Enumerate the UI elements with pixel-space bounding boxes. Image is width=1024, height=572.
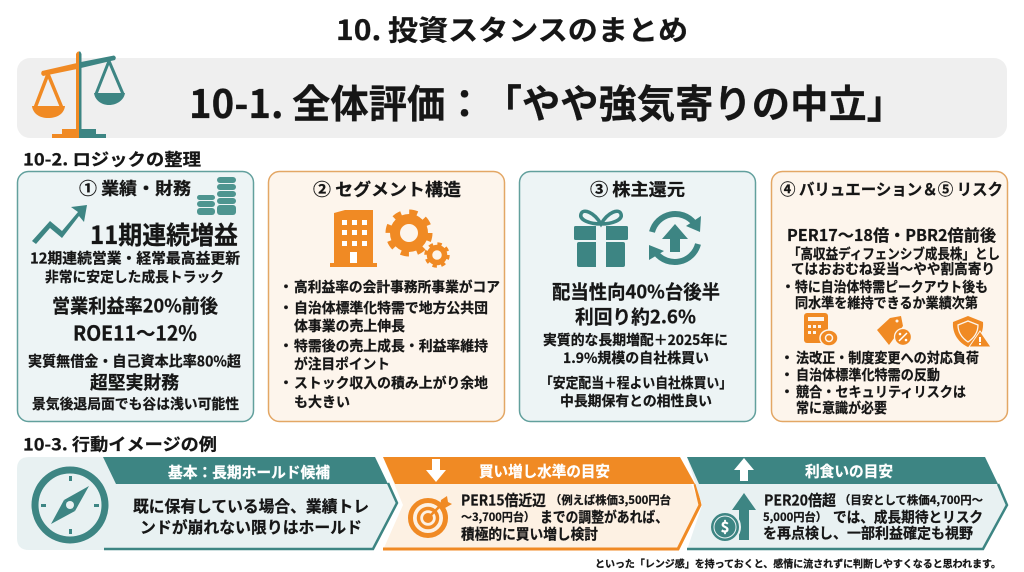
- bullet list: ・: [279, 277, 293, 297]
- bullet list: risks: 競合・セキュリティリスクは: [796, 382, 966, 402]
- text block: valuation notes: 特に自治体特需ピークアウト後も: [795, 277, 988, 297]
- body text: までの調整があれば、: [540, 506, 668, 528]
- icon: compass: [35, 470, 105, 540]
- body text: 積極的に買い増し検討: [461, 524, 598, 544]
- bullet list: ・: [279, 336, 293, 356]
- text block: suitability: 「安定配当＋程よい自社株買い」: [540, 373, 732, 393]
- bullet list: も大きい: [294, 392, 350, 412]
- key result: 11期連続増益: [90, 216, 238, 252]
- text block: valuation notes: 同水準を維持できるか業績次第: [795, 293, 978, 313]
- text block: balance sheet: [28, 350, 241, 414]
- bullet list: risks: ・: [780, 382, 794, 402]
- key figures: 配当性向40%台後半: [552, 278, 720, 304]
- text block: buyback: 実質的な長期増配＋2025年に: [543, 330, 728, 350]
- icon: balance scale: [32, 51, 125, 138]
- body text: （例えば株価3,500円台: [550, 492, 671, 508]
- banner: overall evaluation: [17, 51, 1007, 138]
- bullet list: [279, 277, 500, 412]
- body text: を再点検し、一部利益確定も視野: [763, 522, 973, 544]
- bullet list: risks: 法改正・制度変更への対応負荷: [796, 348, 979, 368]
- icon: office building: [330, 210, 377, 267]
- header band: [687, 457, 998, 484]
- title: 10. 投資スタンスのまとめ: [336, 9, 688, 49]
- body text: ～3,700円台）: [461, 509, 535, 525]
- icon: coins: [197, 177, 236, 215]
- icon: target: [410, 496, 452, 536]
- text block: valuation notes: 「高収益ディフェンシブ成長株」とし: [788, 244, 1000, 264]
- header text: 買い増し水準の目安: [479, 460, 610, 482]
- text block: suitability: 中長期保有との相性良い: [560, 391, 712, 411]
- key valuation: PER17～18倍・PBR2倍前後: [787, 222, 996, 246]
- text block: suitability: [540, 373, 732, 411]
- bullet list: ・: [279, 298, 293, 318]
- panel: shareholder returns: [520, 172, 756, 422]
- icon: gears: [388, 212, 448, 266]
- text block: margins: [52, 292, 218, 346]
- icon: dollar coin with arrow: $: [721, 516, 729, 538]
- bullet list: ・: [279, 373, 293, 393]
- icon: rising arrow: [32, 205, 87, 244]
- body text: PER20倍超: [764, 490, 836, 510]
- text block: balance sheet: 超堅実財務: [90, 369, 179, 395]
- icon: calculator: [804, 313, 838, 346]
- bullet list: risks: ・: [780, 348, 794, 368]
- key figures: [552, 278, 720, 330]
- body text: （目安として株価4,700円～: [839, 492, 983, 508]
- body text: では、成長期待とリスク: [833, 506, 983, 528]
- bullet list: 体事業の売上伸長: [294, 316, 405, 336]
- text block: valuation notes: [781, 244, 1000, 313]
- body text: 5,000円台）: [763, 509, 827, 525]
- icon: price tag: [877, 316, 912, 346]
- panel: results and finance: [18, 172, 254, 422]
- text block: balance sheet: 景気後退局面でも谷は浅い可能性: [32, 394, 239, 414]
- panel heading: ② セグメント構造: [313, 176, 461, 200]
- body text: PER15倍近辺: [461, 490, 546, 510]
- bullet list: ストック収入の積み上がり余地: [294, 373, 488, 393]
- text block: margins: 営業利益率20%前後: [52, 292, 218, 318]
- header band: [383, 457, 695, 484]
- text block: margins: ROE11～12%: [73, 318, 197, 346]
- text block: valuation notes: ・: [781, 277, 795, 297]
- icon: dollar coin with arrow: [710, 493, 756, 542]
- body text: [461, 490, 671, 544]
- text block: buyback: 1.9%規模の自社株買い: [563, 348, 709, 368]
- body text: 既に保有している場合、業績トレ: [133, 493, 369, 517]
- footnote: といった「レンジ感」を持っておくと、感情に流されずに判断しやすくなると思われます。: [595, 556, 1001, 570]
- body text: [763, 490, 983, 544]
- header text: 基本：長期ホールド候補: [168, 462, 330, 482]
- text block: valuation notes: てはおおむね妥当～やや割高寄り: [791, 259, 995, 279]
- panel: valuation and risk: [772, 172, 1008, 422]
- bullet list: risks: 自治体標準化特需の反動: [796, 365, 940, 385]
- icon: shield warning: [953, 316, 991, 347]
- panel: segment structure: [268, 172, 504, 422]
- text block: growth track: 12期連続営業・経常最高益更新: [30, 248, 241, 268]
- header text: 利食いの目安: [805, 460, 893, 482]
- icon: cycle with up arrow: [649, 214, 701, 262]
- bullet list: 特需後の売上成長・利益率維持: [294, 336, 488, 356]
- text block: buyback: [543, 330, 728, 368]
- bullet list: risks: [780, 348, 979, 418]
- section heading: logic: 10-2. ロジックの整理: [23, 146, 201, 170]
- icon: gift box: [574, 211, 628, 267]
- header band: [103, 457, 388, 484]
- section heading: action examples: 10-3. 行動イメージの例: [23, 430, 217, 456]
- text block: balance sheet: 実質無借金・自己資本比率80%超: [28, 350, 241, 372]
- arrow panel: profit-taking: [687, 457, 1007, 550]
- body text: [133, 493, 369, 538]
- text block: growth track: [30, 248, 241, 287]
- body text: ンドが崩れない限りはホールド: [140, 514, 362, 538]
- text block: growth track: 非常に安定した成長トラック: [45, 267, 224, 287]
- arrow panel: add-on level: [383, 457, 700, 550]
- panel heading: ④ バリュエーション＆⑤ リスク: [780, 176, 1003, 200]
- panel heading: ① 業績・財務: [79, 174, 191, 200]
- banner heading: 10-1. 全体評価：「やや強気寄りの中立」: [189, 74, 905, 130]
- bullet list: 自治体標準化特需で地方公共団: [294, 298, 488, 318]
- key figures: 利回り約2.6%: [575, 302, 696, 330]
- bullet list: 高利益率の会計事務所事業がコア: [294, 277, 500, 297]
- icon: down arrow: [426, 459, 446, 482]
- icon: up arrow: [734, 458, 754, 481]
- arrow panel: basic long-term hold: [17, 457, 397, 550]
- bullet list: が注目ポイント: [294, 354, 390, 374]
- panel heading: ③ 株主還元: [590, 176, 685, 200]
- bullet list: risks: 常に意識が必要: [796, 398, 887, 418]
- bullet list: risks: ・: [780, 365, 794, 385]
